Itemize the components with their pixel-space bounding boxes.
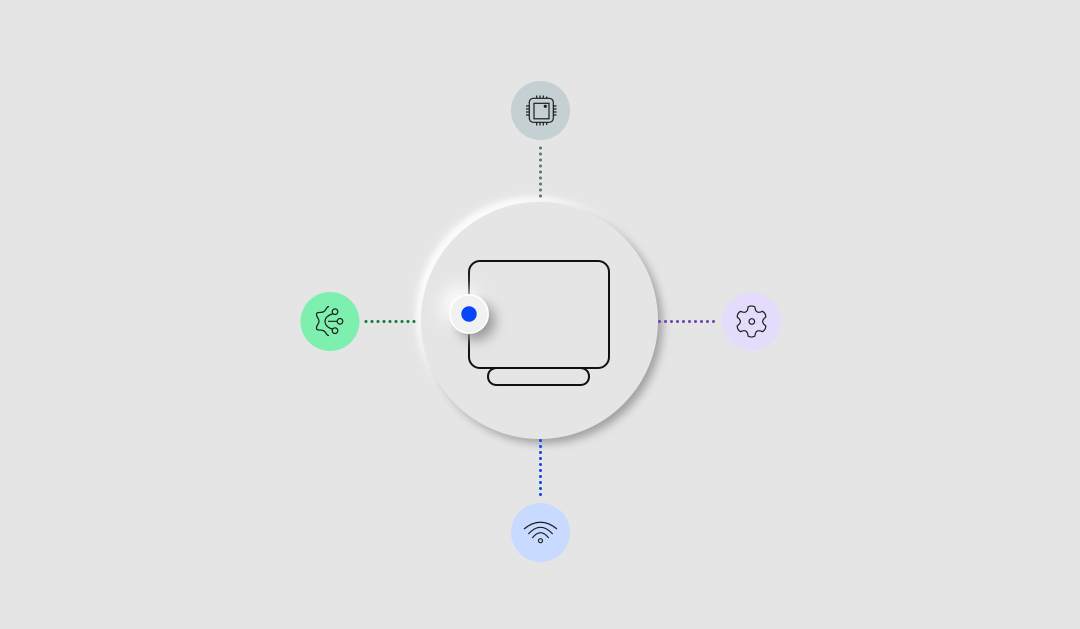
monitor stand bbox=[488, 368, 589, 385]
dotted connector: right bbox=[660, 320, 716, 323]
dotted connector: top bbox=[539, 148, 542, 198]
node: chip bbox=[511, 81, 570, 140]
node: network bbox=[300, 292, 360, 351]
icon: branching head bbox=[316, 307, 343, 336]
blue status dot bbox=[461, 306, 477, 322]
icon: processor chip bbox=[526, 96, 556, 126]
central disc shadows bbox=[416, 197, 662, 444]
node: settings bbox=[722, 292, 781, 351]
node: wifi bbox=[511, 503, 570, 562]
central device disc bbox=[421, 202, 658, 439]
icon: gear bbox=[737, 306, 766, 337]
monitor screen bbox=[469, 261, 609, 368]
indicator button bbox=[442, 287, 495, 340]
icon: wifi signal bbox=[524, 522, 557, 543]
dotted connector: left bbox=[366, 320, 417, 323]
monitor icon bbox=[469, 261, 609, 385]
dotted connector: bottom bbox=[539, 440, 542, 496]
